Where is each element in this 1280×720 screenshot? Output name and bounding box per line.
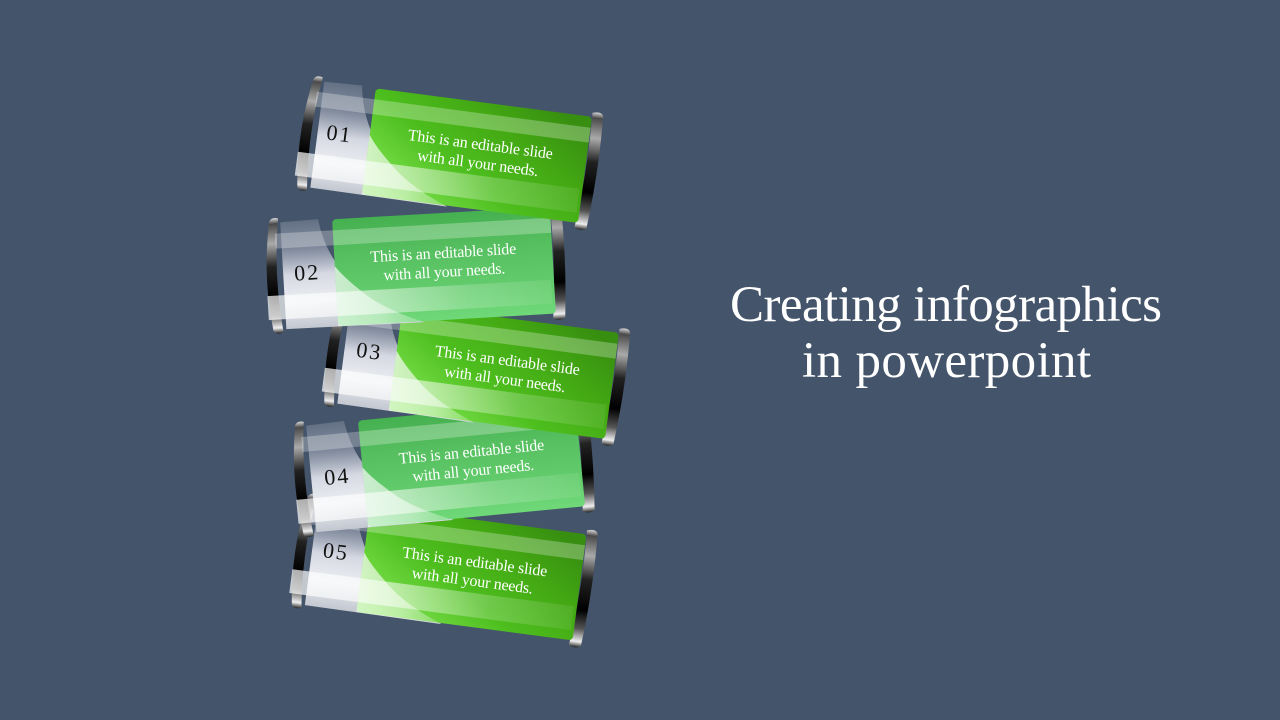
battery 03: with all your needs.: [443, 363, 566, 396]
title: [730, 277, 1162, 389]
battery 01: This is an editable slide: [407, 127, 554, 163]
battery 03: 03: [355, 337, 382, 365]
title: Creating infographics: [730, 277, 1162, 333]
battery 02: with all your needs.: [383, 260, 506, 284]
battery 05: [287, 492, 599, 648]
battery 01: [293, 74, 605, 231]
battery 04: This is an editable slide: [398, 437, 545, 468]
battery 04: 04: [323, 463, 349, 490]
battery 03: This is an editable slide: [434, 343, 581, 379]
battery 04: with all your needs.: [412, 457, 535, 486]
battery 05: This is an editable slide: [401, 545, 548, 580]
battery 04: [289, 393, 598, 540]
title: in powerpoint: [802, 333, 1091, 389]
battery 02: 02: [293, 259, 319, 286]
battery 05: with all your needs.: [411, 565, 534, 598]
battery 02: [263, 201, 568, 337]
battery 05: 05: [322, 537, 349, 565]
battery 02: This is an editable slide: [370, 241, 517, 266]
battery 01: with all your needs.: [416, 147, 539, 180]
battery 03: [320, 290, 632, 447]
battery 01: 01: [325, 119, 352, 147]
